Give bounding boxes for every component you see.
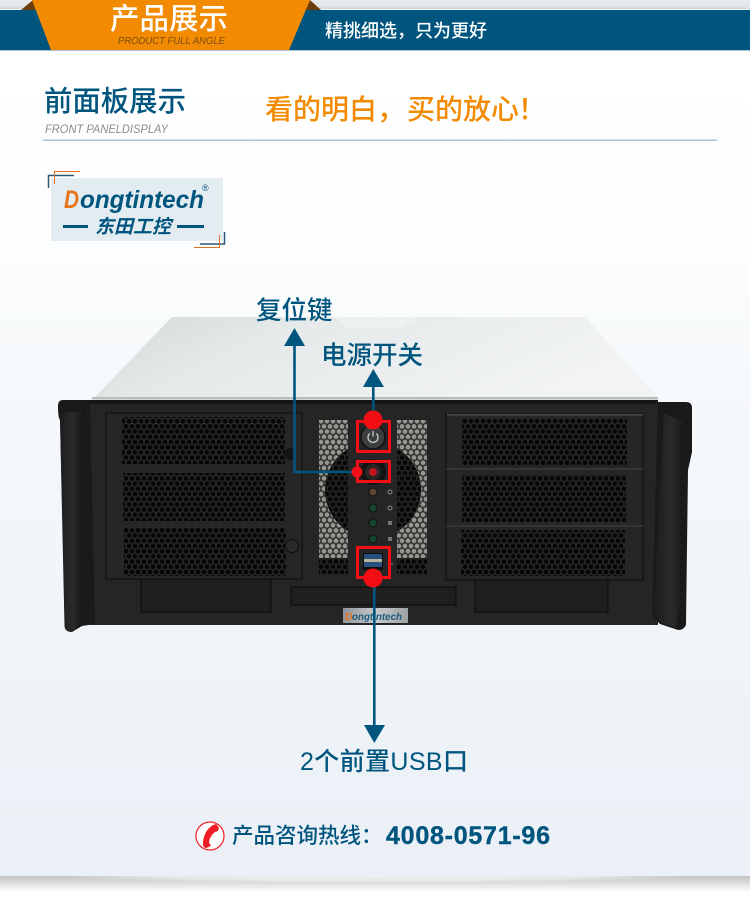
- brand plate: [343, 608, 408, 623]
- orange slogan: 买的放心: [407, 94, 519, 125]
- chassis front: [90, 400, 658, 625]
- brand plate: ongtintech: [352, 611, 402, 623]
- logo: ongtintech: [80, 186, 204, 214]
- logo: ®: [202, 183, 209, 193]
- arrow: USB: [364, 568, 385, 743]
- highlight box: reset: [358, 462, 390, 482]
- fan grille left: [319, 420, 348, 574]
- chassis: [58, 317, 692, 632]
- orange slogan: 看的明白，: [265, 94, 405, 125]
- section heading: 前面板展示: [44, 86, 186, 118]
- left handle: [58, 400, 95, 632]
- label: USB: 2个前置USB口: [300, 748, 468, 776]
- logo: D: [64, 186, 79, 214]
- section subtitle: FRONT PANELDISPLAY: [45, 122, 169, 136]
- label: power: 电源开关: [321, 342, 423, 370]
- arrow: power: [363, 369, 384, 430]
- fan grille right: [397, 420, 427, 574]
- highlight box: power: [358, 422, 390, 452]
- header subtitle: PRODUCT FULL ANGLE: [118, 36, 225, 47]
- icon: phone: [196, 822, 224, 850]
- right handle: [652, 402, 692, 630]
- orange slogan: ！: [518, 94, 546, 125]
- right drive panel: [446, 414, 643, 580]
- highlight box: USB: [358, 548, 390, 578]
- label: reset: 复位键: [256, 297, 333, 325]
- hotline: 4008-0571-96: [386, 822, 550, 850]
- section heading: [44, 86, 186, 136]
- logo: 东田工控: [95, 216, 174, 238]
- header banner: [0, 0, 750, 51]
- bottom tabs: [141, 579, 608, 612]
- hotline: 产品咨询热线：: [232, 824, 383, 848]
- power button: [361, 425, 385, 449]
- USB ports: [363, 553, 393, 570]
- brand plate: D: [345, 611, 353, 623]
- bottom shadow: [0, 876, 750, 892]
- header title: 产品展示: [110, 3, 228, 36]
- header slogan: 精挑细选，只为更好: [325, 21, 487, 41]
- left drive panel: [106, 413, 302, 579]
- arrow: reset: [284, 328, 362, 478]
- hotline: [196, 822, 550, 850]
- reset button: [360, 459, 386, 485]
- status LEDs: [369, 488, 392, 543]
- logo: [48, 172, 224, 248]
- chassis lid: [95, 317, 657, 397]
